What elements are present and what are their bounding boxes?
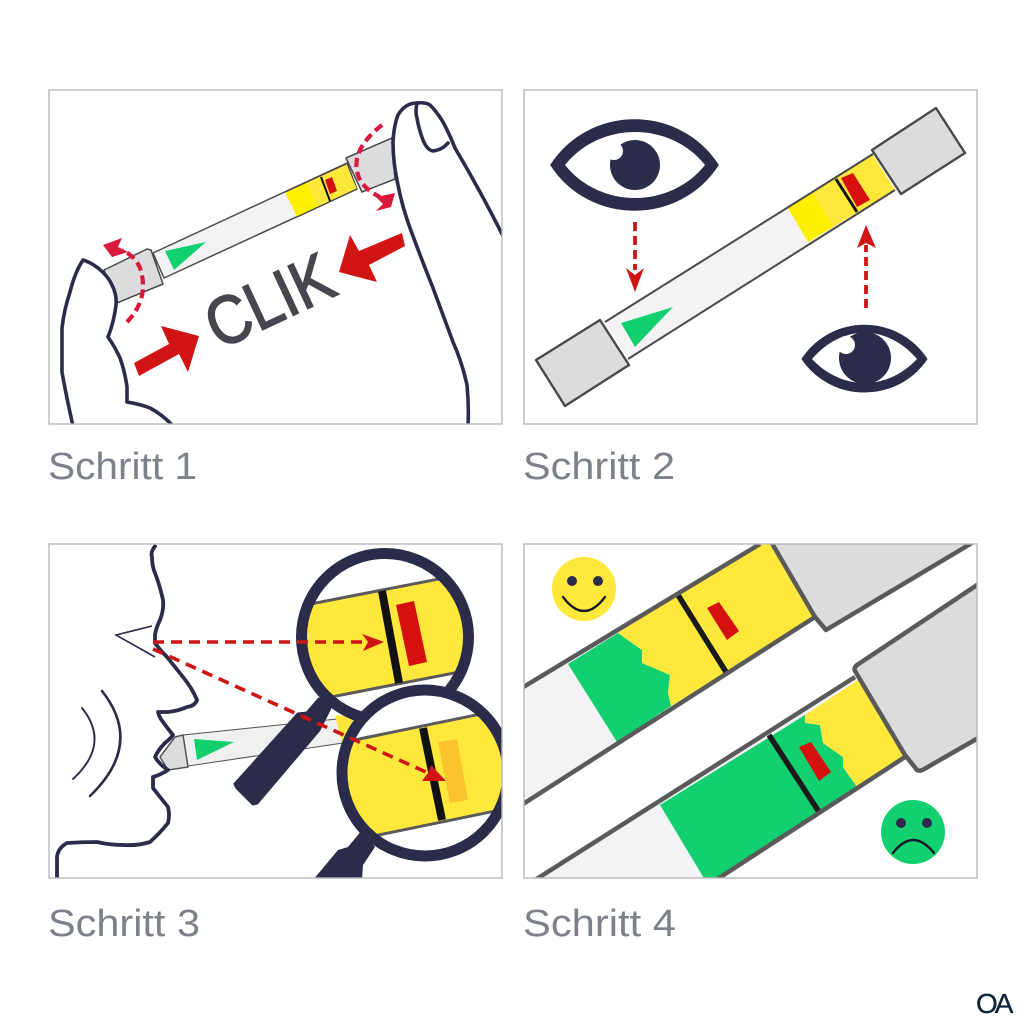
panel border: step 2 xyxy=(524,90,977,424)
arrow: eye down to marker xyxy=(626,222,644,292)
panel border: step 4 xyxy=(524,544,977,878)
test strip in mouth xyxy=(160,715,355,770)
arrow: press left xyxy=(339,233,405,282)
dashed arc: right twist xyxy=(356,125,395,211)
panel: step 2 xyxy=(534,106,966,408)
panel: step 1 xyxy=(49,90,504,426)
test strip xyxy=(104,138,395,303)
test strip xyxy=(536,108,965,406)
panel border: step 1 xyxy=(49,90,502,424)
breath waves xyxy=(73,691,120,796)
heading: Schritt 3: Schritt 3 xyxy=(48,903,200,945)
left thumb xyxy=(62,260,173,426)
arrow: gaze to top magnifier xyxy=(153,634,384,651)
eye outline xyxy=(116,626,155,657)
arrow: eye up to window xyxy=(857,225,876,308)
heading: Schritt 2: Schritt 2 xyxy=(523,446,675,488)
arrow: press right xyxy=(134,326,199,376)
dashed arc: left twist xyxy=(103,238,143,322)
heading: Schritt 4: Schritt 4 xyxy=(523,903,676,945)
icon: upper eye xyxy=(551,120,718,210)
panel: step 3 xyxy=(49,544,510,880)
icon: happy face xyxy=(552,557,616,621)
right hand xyxy=(393,103,504,426)
magnifier: top xyxy=(235,553,480,804)
icon: sad face xyxy=(881,800,945,864)
panel: step 4 xyxy=(520,530,980,880)
logo: OA: OA xyxy=(976,988,1014,1019)
heading: Schritt 1: Schritt 1 xyxy=(48,446,197,488)
icon: lower eye xyxy=(802,325,927,392)
arrow: gaze to bottom magnifier xyxy=(153,649,446,781)
face profile xyxy=(57,545,197,880)
test strip: good result xyxy=(520,530,972,806)
test strip: bad result xyxy=(535,583,980,880)
CLIK label: CLIK xyxy=(193,239,346,364)
magnifier: bottom xyxy=(313,690,510,880)
panel border: step 3 xyxy=(49,544,502,878)
